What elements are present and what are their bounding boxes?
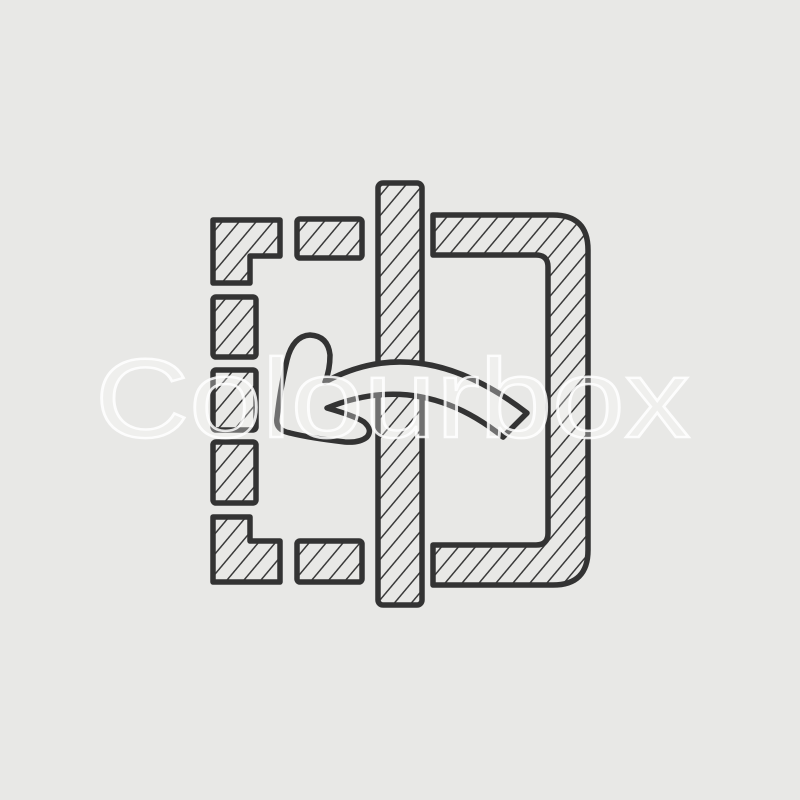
- left dash 2: [213, 370, 256, 430]
- right bracket: [433, 215, 588, 585]
- top dash: [297, 219, 362, 258]
- top-left corner: [213, 220, 280, 283]
- vertical axis bar: [378, 183, 422, 605]
- icon group: [213, 183, 588, 605]
- left dash 3: [213, 442, 256, 503]
- watermark: Colourbox: [95, 336, 690, 461]
- bottom-left corner: [213, 517, 280, 582]
- left dash 1: [213, 297, 256, 357]
- bottom dash: [297, 541, 362, 582]
- arrow: [277, 335, 527, 442]
